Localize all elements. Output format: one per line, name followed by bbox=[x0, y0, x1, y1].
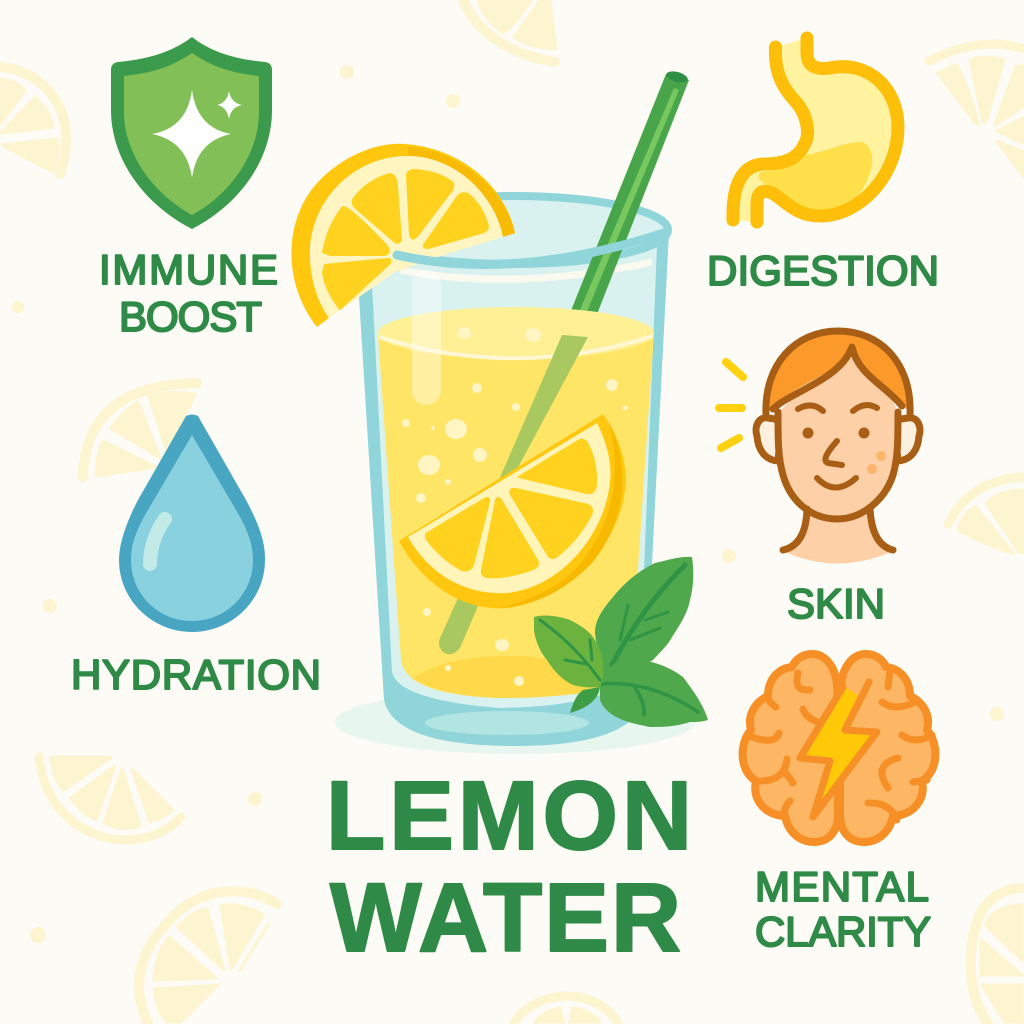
icon: water drop bbox=[119, 414, 265, 632]
glass rim front bbox=[397, 232, 667, 264]
glass bbox=[355, 196, 669, 746]
straw in liquid bbox=[439, 335, 588, 654]
glass highlight bbox=[412, 270, 441, 405]
lemon slice on rim bbox=[291, 144, 515, 327]
icon: glow rays bbox=[719, 362, 743, 448]
glass shadow bbox=[335, 690, 695, 754]
label: hydration: HYDRATION bbox=[71, 651, 321, 698]
title bbox=[326, 761, 692, 972]
lemon slice in glass bbox=[399, 414, 626, 608]
title: LEMON bbox=[326, 761, 692, 870]
label: mental clarity: CLARITY bbox=[755, 908, 931, 955]
lemonade liquid bbox=[378, 307, 654, 698]
bubbles bbox=[402, 327, 628, 686]
label: immune boost: IMMUNE bbox=[99, 246, 278, 293]
label: digestion: DIGESTION bbox=[707, 247, 939, 294]
label: mental clarity bbox=[755, 863, 931, 955]
title: WATER bbox=[330, 863, 681, 972]
label: immune boost: BOOST bbox=[119, 293, 262, 340]
label: mental clarity: MENTAL bbox=[755, 863, 929, 910]
icon: face bbox=[756, 331, 920, 564]
icon: shield bbox=[111, 37, 272, 229]
label: skin: SKIN bbox=[787, 580, 885, 627]
straw upper bbox=[562, 69, 689, 337]
icon: brain bbox=[743, 654, 935, 842]
icon: stomach bbox=[733, 38, 898, 222]
label: immune boost bbox=[99, 246, 278, 340]
mint leaves bbox=[534, 557, 708, 727]
